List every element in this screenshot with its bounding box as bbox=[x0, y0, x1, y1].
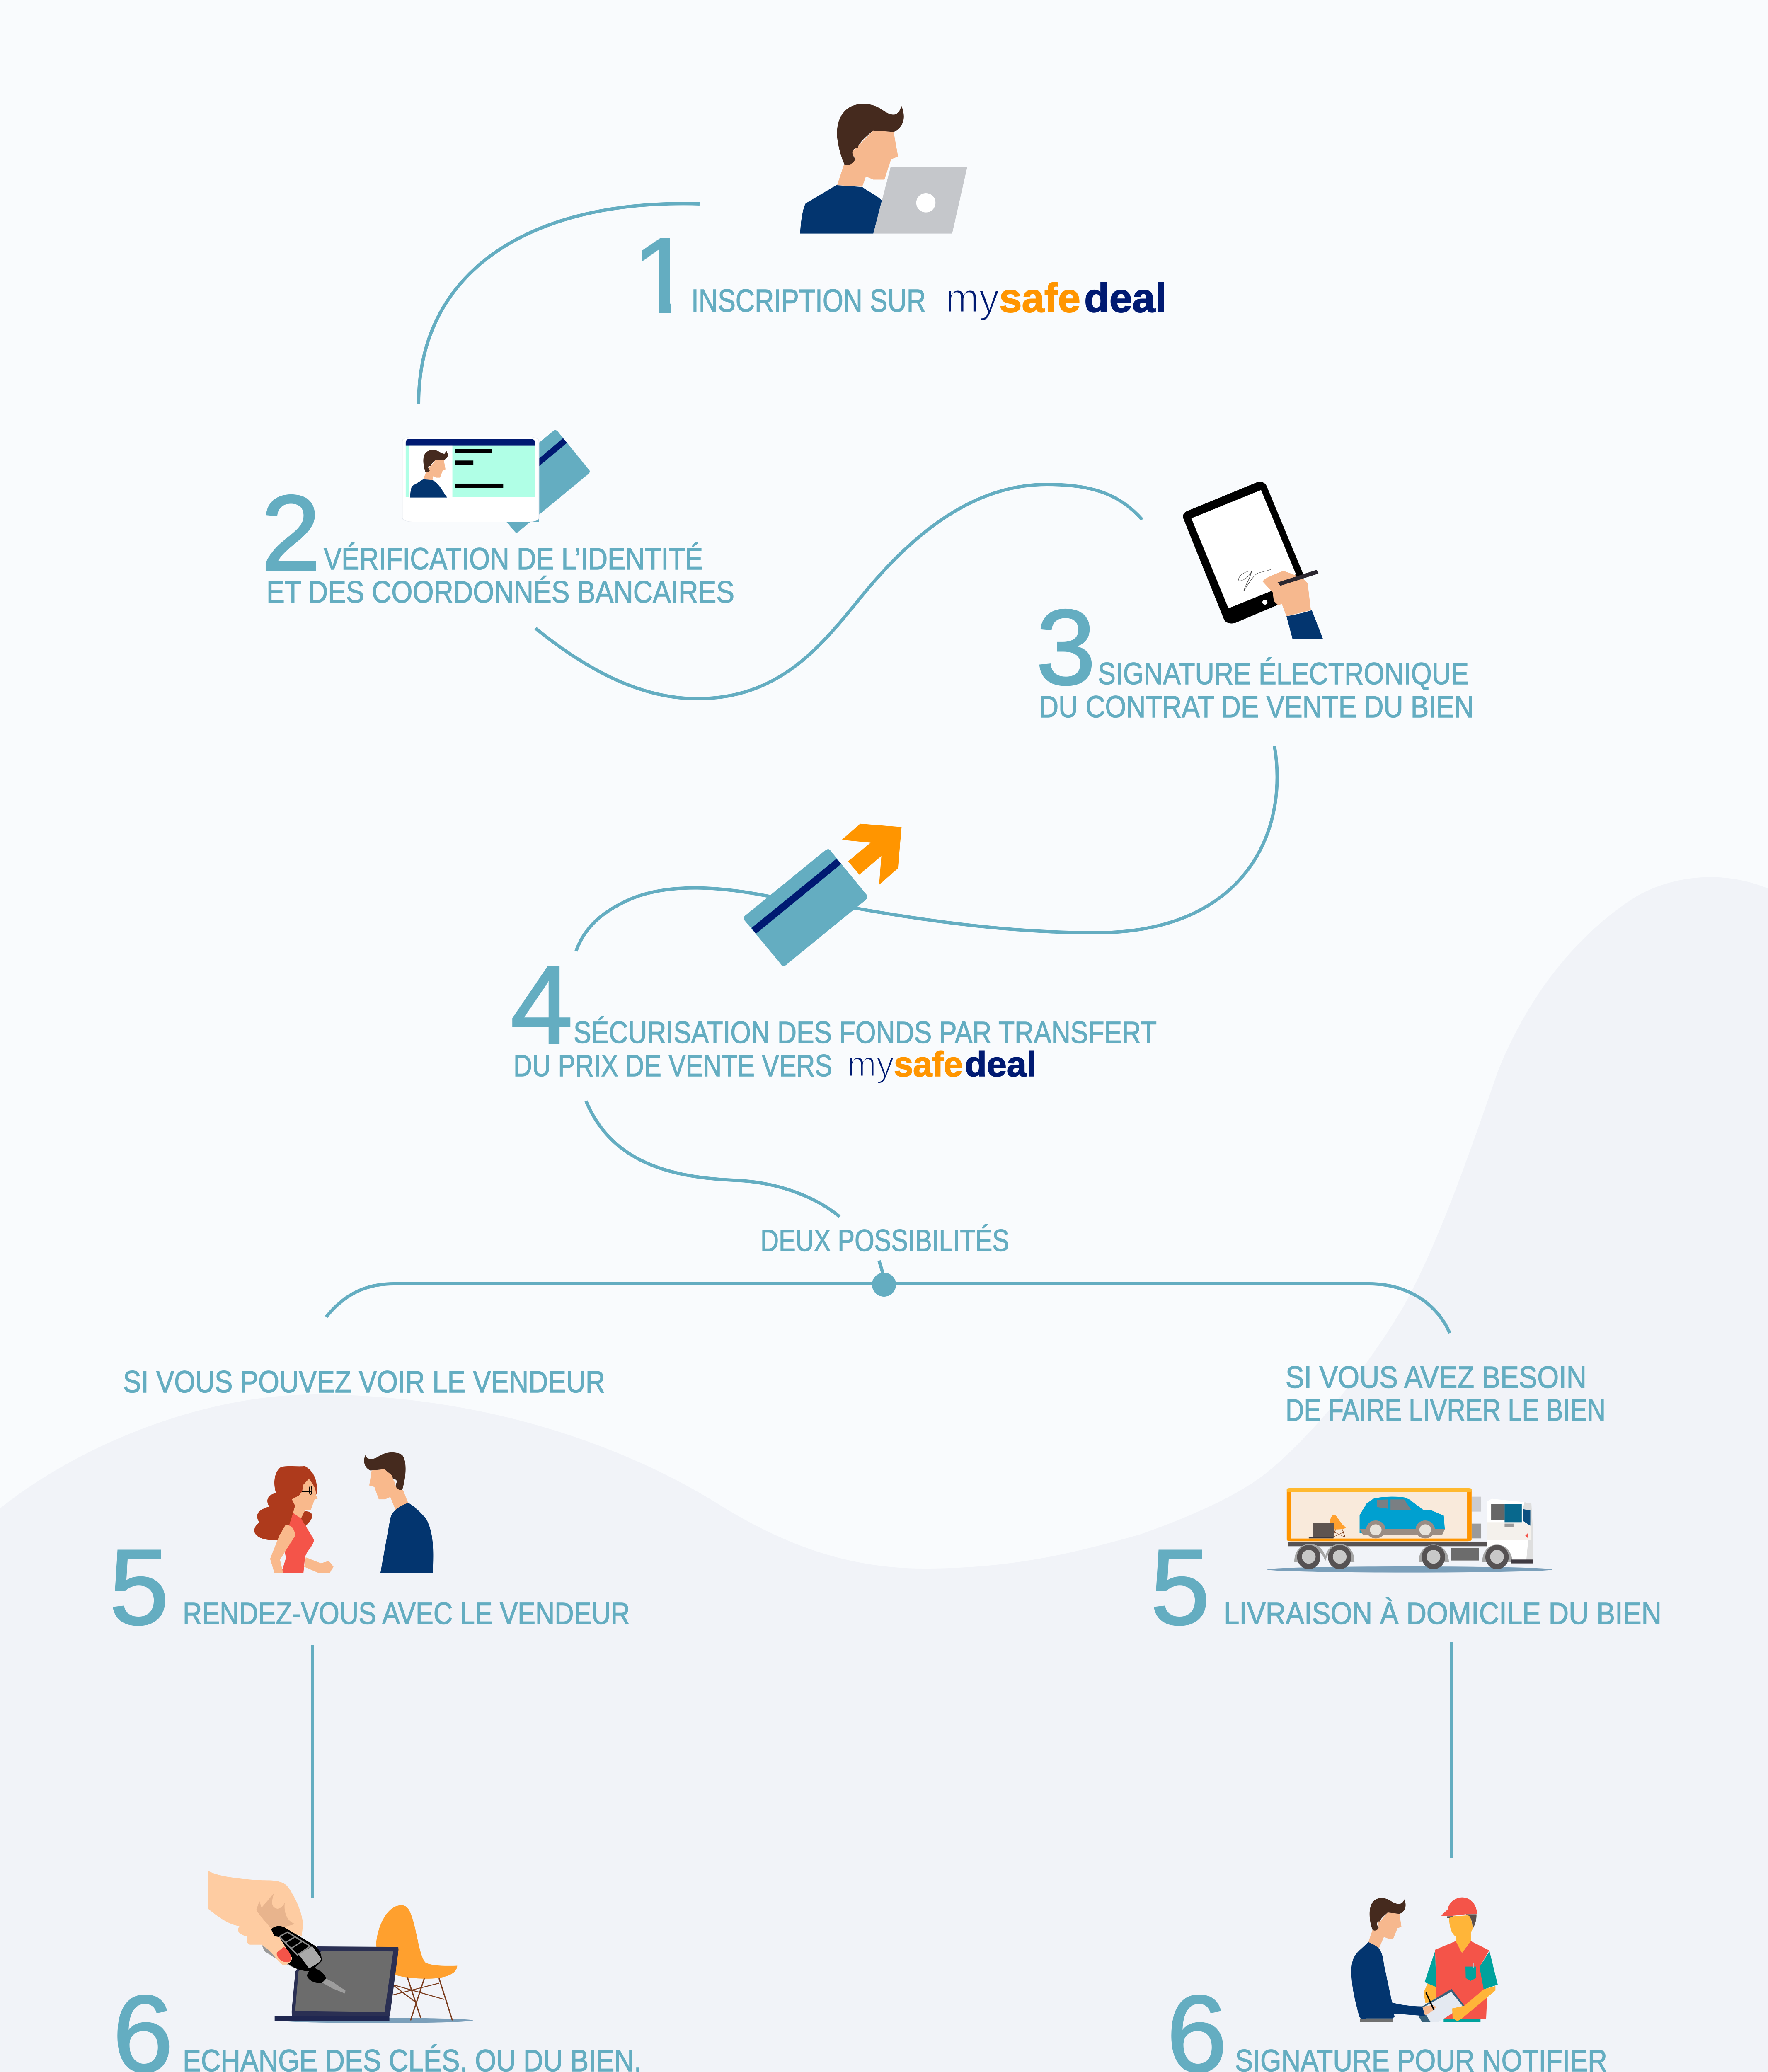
step 1 text: 1 bbox=[633, 215, 692, 335]
connector: left step 5 to step 6 bbox=[311, 1645, 314, 1898]
background wave bbox=[0, 877, 1768, 2072]
step 2 text: ET DES COORDONNÉS BANCAIRES bbox=[266, 575, 734, 609]
icon: man with laptop bbox=[800, 104, 967, 234]
step 6 right text bbox=[1166, 1973, 1607, 2072]
connector: step 4 to two options bbox=[586, 1101, 840, 1217]
step 5 left text bbox=[109, 1527, 630, 1647]
right option text: SI VOUS AVEZ BESOIN bbox=[1286, 1360, 1586, 1394]
logo: mysafedeal small: safe bbox=[894, 1045, 963, 1084]
icon: bank card with arrow bbox=[744, 824, 901, 966]
step 5 right text: 5 bbox=[1150, 1527, 1210, 1647]
step 4 text: SÉCURISATION DES FONDS PAR TRANSFERT bbox=[574, 1015, 1157, 1050]
step 4 text bbox=[511, 943, 1157, 1083]
step 4 text: DU PRIX DE VENTE VERS bbox=[513, 1048, 832, 1083]
step 4 text: 4 bbox=[511, 943, 573, 1067]
step 3 text bbox=[1036, 587, 1474, 724]
icon: delivery truck bbox=[1267, 1488, 1552, 1573]
step 5 right text: LIVRAISON À DOMICILE DU BIEN bbox=[1224, 1596, 1661, 1631]
step 2 text: VÉRIFICATION DE L’IDENTITÉ bbox=[324, 542, 703, 576]
step 2 text: 2 bbox=[261, 473, 321, 593]
step 3 text: DU CONTRAT DE VENTE DU BIEN bbox=[1039, 690, 1474, 724]
icon: identity card and bank card bbox=[402, 430, 590, 533]
logo: mysafedeal small bbox=[847, 1045, 1037, 1084]
icon: delivery man and buyer signing bbox=[1351, 1898, 1498, 2022]
icon: tablet signature bbox=[1183, 482, 1323, 639]
logo: mysafedeal: safe bbox=[999, 275, 1080, 321]
right option text bbox=[1286, 1360, 1606, 1427]
step 1 text bbox=[642, 238, 925, 313]
right option text: DE FAIRE LIVRER LE BIEN bbox=[1286, 1393, 1606, 1427]
step 3 text: 3 bbox=[1036, 587, 1096, 707]
left option text: SI VOUS POUVEZ VOIR LE VENDEUR bbox=[123, 1365, 605, 1399]
step 6 left text bbox=[113, 1973, 642, 2072]
step 2 text bbox=[261, 473, 734, 609]
step 5 right text bbox=[1150, 1527, 1661, 1647]
connector: step 2 to step 3 bbox=[535, 484, 1142, 699]
logo: mysafedeal small: my bbox=[847, 1045, 894, 1084]
connector: right step 5 to step 6 bbox=[1450, 1642, 1453, 1858]
connector: branch between the two options bbox=[326, 1261, 1450, 1333]
logo: mysafedeal small: deal bbox=[965, 1045, 1037, 1084]
step 5 left text: 5 bbox=[109, 1527, 169, 1647]
connector: step 1 to step 2 bbox=[419, 203, 700, 404]
logo: mysafedeal: deal bbox=[1084, 275, 1167, 321]
logo: mysafedeal bbox=[945, 275, 1167, 321]
logo: mysafedeal: my bbox=[945, 275, 999, 321]
icon: buyer meets seller bbox=[254, 1452, 433, 1573]
step 5 left text: RENDEZ-VOUS AVEC LE VENDEUR bbox=[183, 1596, 630, 1631]
heading: two possibilities: DEUX POSSIBILITÉS bbox=[760, 1223, 1009, 1258]
icon: hand giving keys, laptop and chair bbox=[208, 1871, 473, 2023]
step 1 text: INSCRIPTION SUR bbox=[691, 283, 926, 319]
connector: step 3 to step 4 bbox=[576, 746, 1277, 951]
step 3 text: SIGNATURE ÉLECTRONIQUE bbox=[1098, 656, 1469, 691]
